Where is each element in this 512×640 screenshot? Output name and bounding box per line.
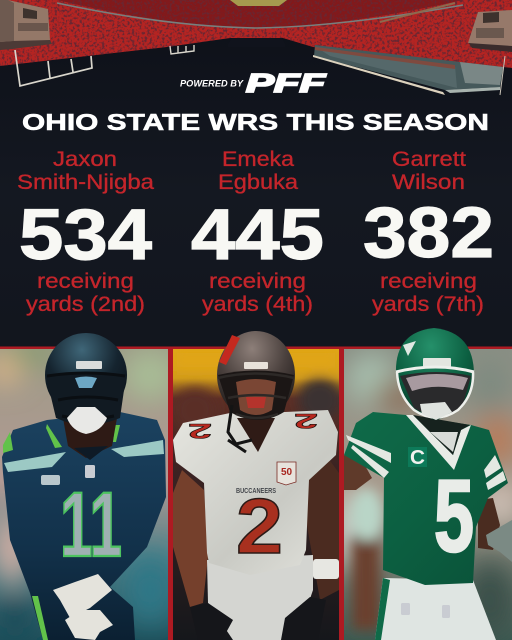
wristband xyxy=(313,559,339,579)
Buccaneers helmet xyxy=(217,331,295,420)
glove xyxy=(486,520,512,562)
left arm xyxy=(173,470,208,607)
stadium header photo xyxy=(0,0,512,95)
right arm xyxy=(306,458,339,600)
stat: Garrett Wilson: receiving xyxy=(380,269,477,293)
gloves xyxy=(190,597,326,640)
stat: Emeka Egbuka: Emeka xyxy=(222,147,294,171)
stat: Garrett Wilson: Wilson xyxy=(392,170,465,194)
powered by PFF logo: POWERED BY xyxy=(180,78,244,88)
stat: Jaxon Smith-Njigba: receiving xyxy=(37,269,134,293)
red frame lines xyxy=(0,346,512,640)
stat: Garrett Wilson: 382 xyxy=(363,194,494,273)
stat: Emeka Egbuka: Egbuka xyxy=(218,170,298,194)
wordmark: BUCCANEERS xyxy=(236,488,276,495)
title: OHIO STATE WRS THIS SEASON xyxy=(22,109,489,135)
Jets pants xyxy=(375,578,496,640)
neck xyxy=(413,415,470,455)
stat: Garrett Wilson: Garrett xyxy=(392,147,466,171)
stat: Emeka Egbuka: 445 xyxy=(191,196,324,275)
stat: Jaxon Smith-Njigba: 534 xyxy=(19,196,153,275)
stat: Jaxon Smith-Njigba: yards (2nd) xyxy=(26,292,145,316)
press box xyxy=(314,45,503,90)
Jets jersey xyxy=(344,412,508,585)
Seahawks helmet xyxy=(45,333,127,434)
powered by PFF logo: PFF xyxy=(246,68,327,98)
panel: Wilson photo xyxy=(338,328,512,640)
stat: Garrett Wilson: yards (7th) xyxy=(372,292,484,316)
chin strap xyxy=(228,405,252,452)
neck xyxy=(63,418,117,458)
stat: Emeka Egbuka xyxy=(191,147,324,316)
jersey number 11: 11 xyxy=(60,474,122,576)
right arm xyxy=(478,498,500,550)
panel: Egbuka photo xyxy=(173,331,342,640)
Jets helmet xyxy=(396,328,474,420)
jersey number 5: 5 xyxy=(434,459,474,573)
sleeve numbers: 2 xyxy=(188,419,212,442)
background player xyxy=(351,489,383,630)
Buccaneers pants xyxy=(207,555,313,640)
stat: Emeka Egbuka: yards (4th) xyxy=(202,292,313,316)
stat: Jaxon Smith-Njigba: Smith-Njigba xyxy=(17,170,154,194)
sleeve numbers: 2 xyxy=(294,409,318,432)
sleeve numbers xyxy=(189,414,318,439)
stat: Jaxon Smith-Njigba: Jaxon xyxy=(53,147,117,171)
panel: Smith-Njigba photo xyxy=(0,333,178,640)
collar xyxy=(406,415,471,470)
left arm xyxy=(344,455,372,490)
50 badge: 50 xyxy=(281,467,292,478)
gloves xyxy=(53,574,113,640)
Seahawks jersey xyxy=(2,412,166,640)
sleeve stripes xyxy=(4,440,164,472)
shields xyxy=(401,603,450,618)
jersey number 2: 2 xyxy=(236,482,283,570)
stat: Emeka Egbuka: receiving xyxy=(209,269,306,293)
stat: Garrett Wilson xyxy=(363,147,494,316)
sleeve stripes xyxy=(346,435,506,490)
captain patch: C xyxy=(410,447,425,469)
50 badge xyxy=(277,462,296,485)
shield badges xyxy=(85,465,95,478)
white frames xyxy=(15,50,92,86)
Buccaneers jersey xyxy=(173,410,338,575)
powered by PFF logo xyxy=(180,68,327,98)
stat: Jaxon Smith-Njigba xyxy=(17,147,154,316)
